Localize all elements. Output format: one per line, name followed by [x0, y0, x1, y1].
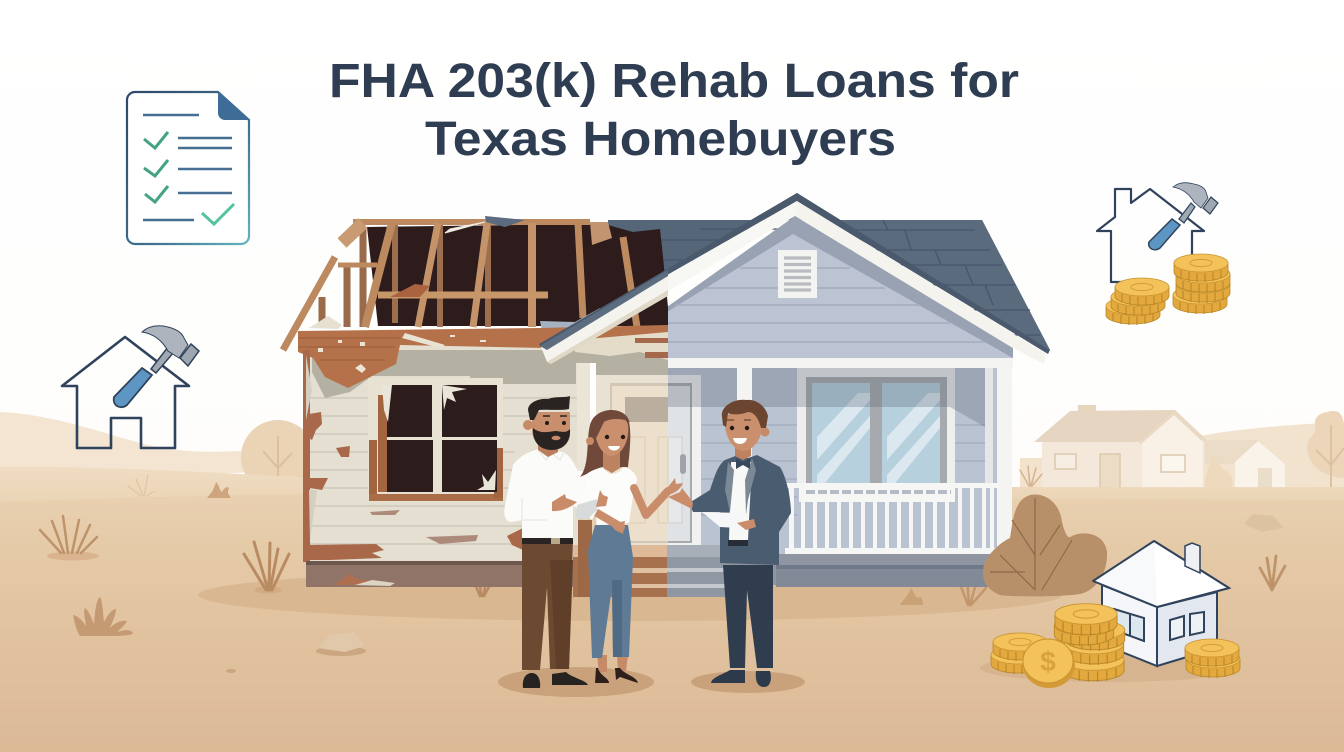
head — [595, 415, 628, 456]
title: FHA 203(k) Rehab Loans for — [329, 55, 1019, 108]
lower wall — [667, 368, 1003, 554]
window frame — [368, 378, 503, 502]
house: restored half — [540, 193, 1050, 587]
attic vent — [778, 250, 817, 298]
bow tie — [736, 458, 750, 469]
long hair — [580, 410, 630, 477]
heels — [595, 668, 638, 683]
porch shade — [667, 368, 992, 431]
gable trim and eave — [539, 193, 1050, 364]
distant hills — [0, 412, 1344, 490]
small house roof — [1093, 541, 1229, 607]
people shadows — [498, 667, 805, 697]
pants — [522, 540, 573, 670]
title — [329, 55, 1019, 166]
debris on roof — [485, 216, 525, 227]
icon: checklist document — [127, 91, 250, 244]
shadow under house — [198, 569, 1062, 621]
cuff and hand — [576, 499, 597, 520]
suit jacket — [689, 455, 791, 565]
roof shingles — [540, 193, 1050, 350]
coin stacks — [1106, 297, 1160, 325]
background tree left — [241, 420, 315, 494]
background tree right — [1307, 411, 1344, 488]
door left half — [596, 375, 668, 545]
peeling paint patches — [303, 350, 523, 562]
dry grass tufts — [40, 466, 1285, 605]
person: loan officer — [668, 400, 791, 687]
pants — [723, 565, 773, 668]
door right half — [667, 375, 701, 545]
tee shirt — [583, 467, 637, 525]
neck — [603, 452, 620, 473]
house: distressed half — [283, 216, 668, 587]
neck — [735, 445, 751, 460]
person: homebuyer man — [504, 396, 608, 688]
belt — [728, 540, 748, 546]
fascia board — [298, 325, 668, 388]
desert ground — [0, 467, 1344, 752]
leafy desert plants — [73, 482, 923, 636]
background houses — [1020, 405, 1286, 488]
person: homebuyer woman — [580, 410, 683, 683]
roof timbers — [283, 222, 637, 350]
broken window panes — [387, 385, 497, 492]
paper — [702, 512, 743, 528]
chimney — [1185, 543, 1200, 573]
shirt front — [729, 462, 752, 540]
lapels — [725, 458, 756, 515]
foundation — [667, 554, 992, 585]
shoes — [523, 672, 588, 688]
porch railing — [785, 483, 998, 554]
foundation left — [306, 561, 576, 587]
title: Texas Homebuyers — [425, 113, 896, 166]
picture window — [797, 368, 955, 486]
coin stacks — [1062, 650, 1124, 682]
shoes — [711, 670, 771, 687]
wall eave shade — [312, 350, 668, 398]
front coin with dollar sign: $ — [1040, 646, 1056, 677]
shirt — [504, 449, 600, 538]
icon: house with hammer, left — [62, 326, 199, 448]
bush — [983, 495, 1107, 596]
legs — [597, 655, 628, 672]
jeans — [588, 525, 633, 658]
neck and head — [538, 440, 558, 457]
siding — [306, 345, 578, 561]
rocks — [226, 514, 1284, 673]
porch beam and columns — [667, 358, 1013, 368]
arms — [634, 488, 668, 515]
gable wall — [667, 216, 1013, 362]
exposed roof cavity — [367, 224, 668, 326]
small house walls — [1102, 585, 1157, 666]
right hand — [737, 519, 756, 530]
icon: house with coins, bottom right — [980, 541, 1240, 688]
front steps — [573, 520, 727, 597]
head — [760, 428, 770, 436]
front coin with dollar sign — [1023, 639, 1075, 688]
left hand — [668, 488, 693, 509]
woman's hand on his arm — [596, 490, 608, 507]
small house windows — [1114, 609, 1144, 641]
icon: house with hammer and coins, right — [1097, 183, 1230, 325]
